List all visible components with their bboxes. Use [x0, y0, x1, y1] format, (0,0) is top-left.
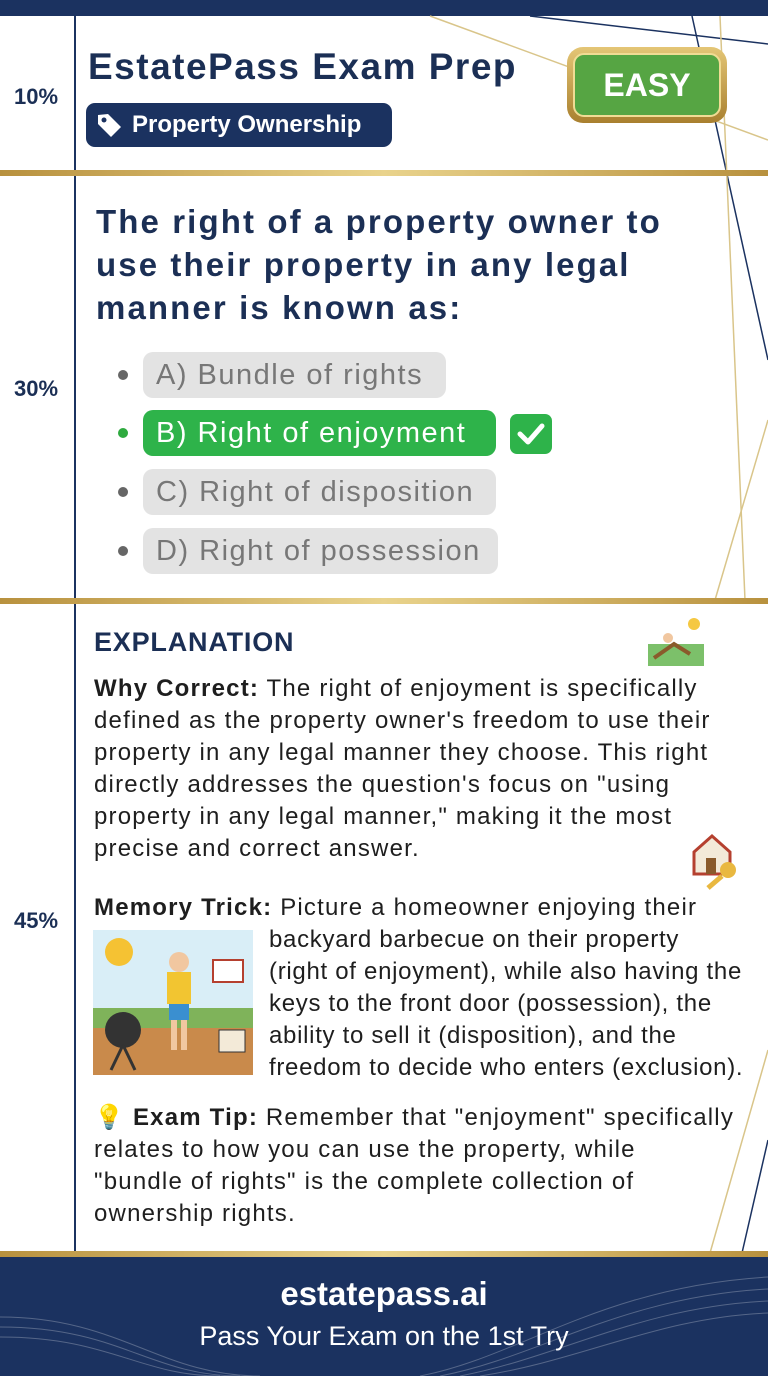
top bar — [0, 0, 768, 16]
text: 45% — [14, 908, 58, 933]
question: manner is known as: — [96, 289, 462, 326]
percentage labels: 10% — [14, 84, 58, 109]
text: keys to the front door (possession), the — [269, 990, 712, 1017]
options: A) Bundle of rights — [156, 359, 423, 391]
title: EstatePass Exam Prep — [88, 46, 517, 87]
options: B) Right of enjoyment — [156, 417, 466, 449]
text: exam tip: "bundle of rights" is the complete collection of — [94, 1168, 634, 1195]
question: The right of a property owner to — [96, 203, 662, 240]
footer brand: estatepass.ai — [280, 1275, 488, 1312]
text: exam tip — [94, 1104, 734, 1227]
heading: explanation: EXPLANATION — [94, 627, 294, 657]
text: why correct: defined as the property owner's freedom to use their — [94, 707, 711, 734]
text: ability to sell it (disposition), and the — [269, 1022, 677, 1049]
tag: Property Ownership: Property Ownership — [132, 111, 361, 138]
text: why correct — [94, 675, 711, 862]
text: why correct: property in any legal manner," making it the most — [94, 803, 672, 830]
tag: Property Ownership — [86, 103, 392, 147]
text: memory trick: Memory Trick: Picture a homeowner enjoying their — [94, 894, 697, 921]
text: why correct: Why Correct: The right of enjoyment is specifically — [94, 675, 698, 702]
options — [118, 352, 552, 574]
question: use their property in any legal — [96, 246, 631, 283]
text: why correct: property in any legal manner they choose. This right — [94, 739, 708, 766]
text: (right of enjoyment), while also having the — [269, 958, 742, 985]
footer tagline: Pass Your Exam on the 1st Try — [199, 1321, 569, 1351]
icon: check — [510, 414, 552, 454]
badge: EASY — [567, 47, 727, 123]
text: 15% — [14, 1300, 58, 1325]
text: exam tip: ownership rights. — [94, 1200, 296, 1227]
text: exam tip: 💡 Exam Tip: Remember that "enjoyment" specifically — [94, 1104, 734, 1131]
left column divider — [74, 16, 76, 1256]
text: freedom to decide who enters (exclusion). — [269, 1054, 743, 1081]
text: exam tip: relates to how you can use the property, while — [94, 1136, 636, 1163]
text: why correct: precise and correct answer. — [94, 835, 420, 862]
text: why correct: directly addresses the question's focus on "using — [94, 771, 670, 798]
illustration: barbecue — [93, 930, 253, 1075]
text: backyard barbecue on their property — [269, 926, 679, 953]
text: 30% — [14, 376, 58, 401]
icon: house key — [692, 834, 736, 890]
footer — [0, 1257, 768, 1376]
question — [96, 203, 662, 326]
icon: relaxing person — [648, 618, 704, 666]
options: D) Right of possession — [156, 535, 481, 567]
icon: tag — [98, 114, 121, 137]
badge: EASY: EASY — [603, 67, 691, 103]
options: C) Right of disposition — [156, 476, 474, 508]
